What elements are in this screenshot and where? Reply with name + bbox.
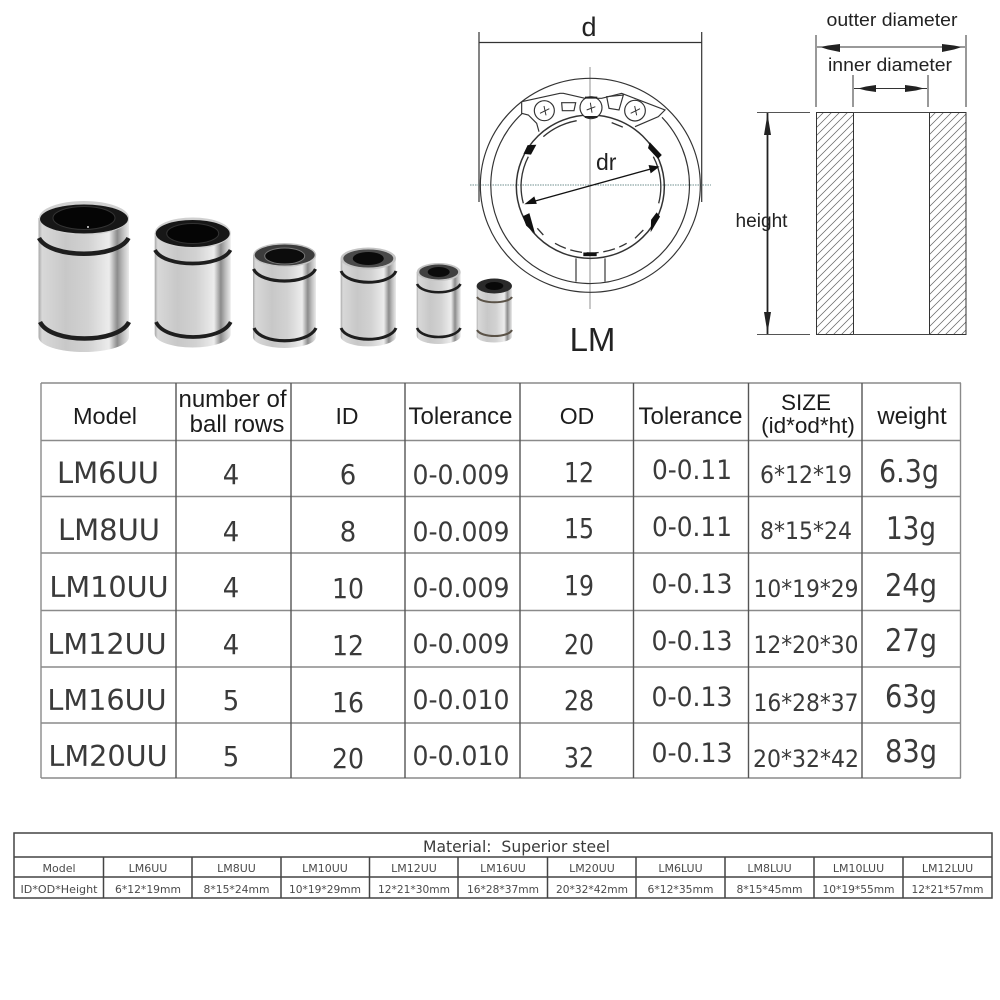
row LM8UU: 0-0.009 bbox=[412, 517, 510, 548]
outer diameter dimension: outter diameter bbox=[826, 10, 958, 30]
model row: LM16UU bbox=[480, 862, 526, 875]
header row: weight bbox=[876, 403, 947, 430]
dimension d: d bbox=[581, 12, 597, 42]
row LM20UU: 5 bbox=[223, 740, 239, 773]
row LM6UU: 12 bbox=[564, 456, 594, 489]
label LM: LM bbox=[570, 321, 615, 358]
row LM8UU: 8*15*24 bbox=[760, 517, 852, 545]
row LM12UU: 0-0.009 bbox=[412, 629, 510, 660]
row LM8UU bbox=[58, 511, 936, 548]
row LM8UU: LM8UU bbox=[58, 513, 160, 547]
model row: LM10UU bbox=[302, 862, 348, 875]
model row: Model bbox=[42, 862, 76, 875]
header row: SIZE bbox=[781, 390, 831, 415]
row LM10UU: 19 bbox=[564, 569, 594, 602]
row LM10UU: 0-0.13 bbox=[652, 569, 732, 600]
row LM10UU bbox=[49, 568, 937, 605]
model row bbox=[42, 862, 973, 875]
row LM6UU: 4 bbox=[223, 458, 239, 491]
row LM20UU: 83g bbox=[885, 734, 937, 770]
header row: OD bbox=[560, 403, 594, 429]
product photos: six linear bearings bbox=[38, 201, 512, 352]
dimensions row: 6*12*19mm bbox=[115, 883, 181, 896]
row LM8UU: 15 bbox=[564, 512, 594, 545]
model row: LM12LUU bbox=[922, 862, 973, 875]
bearing 5 bbox=[417, 263, 461, 344]
row LM6UU: 6*12*19 bbox=[760, 461, 852, 489]
dimensions row: 6*12*35mm bbox=[648, 883, 714, 896]
bearing 4 bbox=[341, 248, 396, 346]
height dimension bbox=[736, 112, 810, 334]
header row: Tolerance bbox=[408, 403, 513, 430]
hatched walls bbox=[816, 112, 966, 334]
row LM16UU: 28 bbox=[564, 684, 594, 717]
header row: Tolerance bbox=[638, 403, 743, 430]
row LM10UU: 4 bbox=[223, 571, 239, 604]
header row: ID bbox=[336, 403, 358, 429]
inner diameter dimension bbox=[828, 55, 952, 107]
row LM8UU: 13g bbox=[886, 511, 936, 547]
row LM16UU bbox=[47, 679, 937, 719]
bearing 3 bbox=[253, 243, 316, 348]
dimensions row: 12*21*30mm bbox=[378, 883, 450, 896]
dimensions row: 12*21*57mm bbox=[912, 883, 984, 896]
row LM12UU: 4 bbox=[223, 628, 239, 661]
dimensions row: 20*32*42mm bbox=[556, 883, 628, 896]
model row: LM6UU bbox=[129, 862, 167, 875]
bearing rings and balls bbox=[480, 78, 700, 292]
row LM10UU: 10*19*29 bbox=[754, 575, 858, 603]
row LM6UU: LM6UU bbox=[57, 456, 159, 490]
header row: Model bbox=[73, 403, 137, 429]
row LM20UU: 20 bbox=[332, 742, 364, 775]
sectional drawing with outer diameter, inner diameter and height bbox=[736, 10, 966, 334]
row LM6UU: 0-0.11 bbox=[652, 455, 732, 486]
row LM12UU: 0-0.13 bbox=[652, 626, 732, 657]
row LM6UU: 0-0.009 bbox=[412, 460, 510, 491]
bearing 1 bbox=[38, 201, 129, 352]
row LM20UU: LM20UU bbox=[48, 739, 168, 773]
dimensions row: 16*28*37mm bbox=[467, 883, 539, 896]
row LM20UU bbox=[48, 734, 937, 775]
row LM16UU: 5 bbox=[223, 684, 239, 717]
material title: Material: Superior steel bbox=[423, 837, 610, 856]
material table grid bbox=[14, 833, 992, 898]
center lines bbox=[470, 67, 711, 309]
height dimension: height bbox=[736, 211, 788, 232]
row LM20UU: 32 bbox=[564, 741, 594, 774]
row LM16UU: 0-0.13 bbox=[652, 682, 732, 713]
dimensions row: 10*19*55mm bbox=[822, 883, 894, 896]
row LM10UU: LM10UU bbox=[49, 570, 169, 604]
row LM20UU: 0-0.13 bbox=[652, 738, 732, 769]
row LM8UU: 4 bbox=[223, 515, 239, 548]
material size table bbox=[14, 833, 992, 898]
dimensions row: 10*19*29mm bbox=[289, 883, 361, 896]
model row: LM6LUU bbox=[658, 862, 703, 875]
specification table bbox=[41, 383, 961, 778]
model row: LM8LUU bbox=[747, 862, 792, 875]
row LM8UU: 8 bbox=[340, 515, 356, 548]
model row: LM12UU bbox=[391, 862, 437, 875]
header row: ball rows bbox=[190, 411, 284, 438]
row LM20UU: 20*32*42 bbox=[753, 745, 859, 773]
inner diameter dimension: inner diameter bbox=[828, 55, 952, 75]
row LM12UU: 20 bbox=[564, 628, 594, 661]
row LM12UU: 12 bbox=[332, 629, 364, 662]
row LM12UU: 27g bbox=[885, 623, 937, 659]
row LM12UU: LM12UU bbox=[47, 627, 167, 661]
dimensions row: 8*15*24mm bbox=[204, 883, 270, 896]
row LM6UU: 6.3g bbox=[879, 454, 939, 490]
header row bbox=[73, 386, 947, 438]
model row: LM20UU bbox=[569, 862, 615, 875]
dimensions row bbox=[20, 883, 984, 896]
label dr: dr bbox=[596, 149, 617, 175]
row LM16UU: 16 bbox=[332, 686, 364, 719]
cross-section diagram of LM bearing bbox=[470, 12, 711, 358]
dimension d bbox=[479, 12, 702, 202]
bearing 6 bbox=[477, 278, 512, 343]
outer diameter dimension bbox=[816, 10, 966, 107]
row LM6UU bbox=[57, 454, 939, 491]
row LM12UU bbox=[47, 623, 937, 662]
dimensions row: 8*15*45mm bbox=[736, 883, 802, 896]
model row: LM8UU bbox=[217, 862, 256, 875]
row LM10UU: 24g bbox=[885, 568, 937, 604]
bearing 2 bbox=[155, 218, 231, 348]
header row: (id*od*ht) bbox=[761, 413, 855, 438]
dimensions row: ID*OD*Height bbox=[20, 883, 98, 896]
row LM10UU: 10 bbox=[332, 572, 364, 605]
row LM16UU: 0-0.010 bbox=[412, 685, 510, 716]
row LM16UU: LM16UU bbox=[47, 683, 167, 717]
row LM20UU: 0-0.010 bbox=[412, 741, 510, 772]
header row: number of bbox=[178, 386, 287, 413]
row LM16UU: 63g bbox=[885, 679, 937, 715]
row LM10UU: 0-0.009 bbox=[412, 573, 510, 604]
row LM8UU: 0-0.11 bbox=[652, 512, 732, 543]
table grid bbox=[41, 383, 961, 778]
model row: LM10LUU bbox=[833, 862, 884, 875]
row LM16UU: 16*28*37 bbox=[754, 689, 858, 717]
row LM6UU: 6 bbox=[340, 458, 356, 491]
row LM12UU: 12*20*30 bbox=[754, 631, 858, 659]
